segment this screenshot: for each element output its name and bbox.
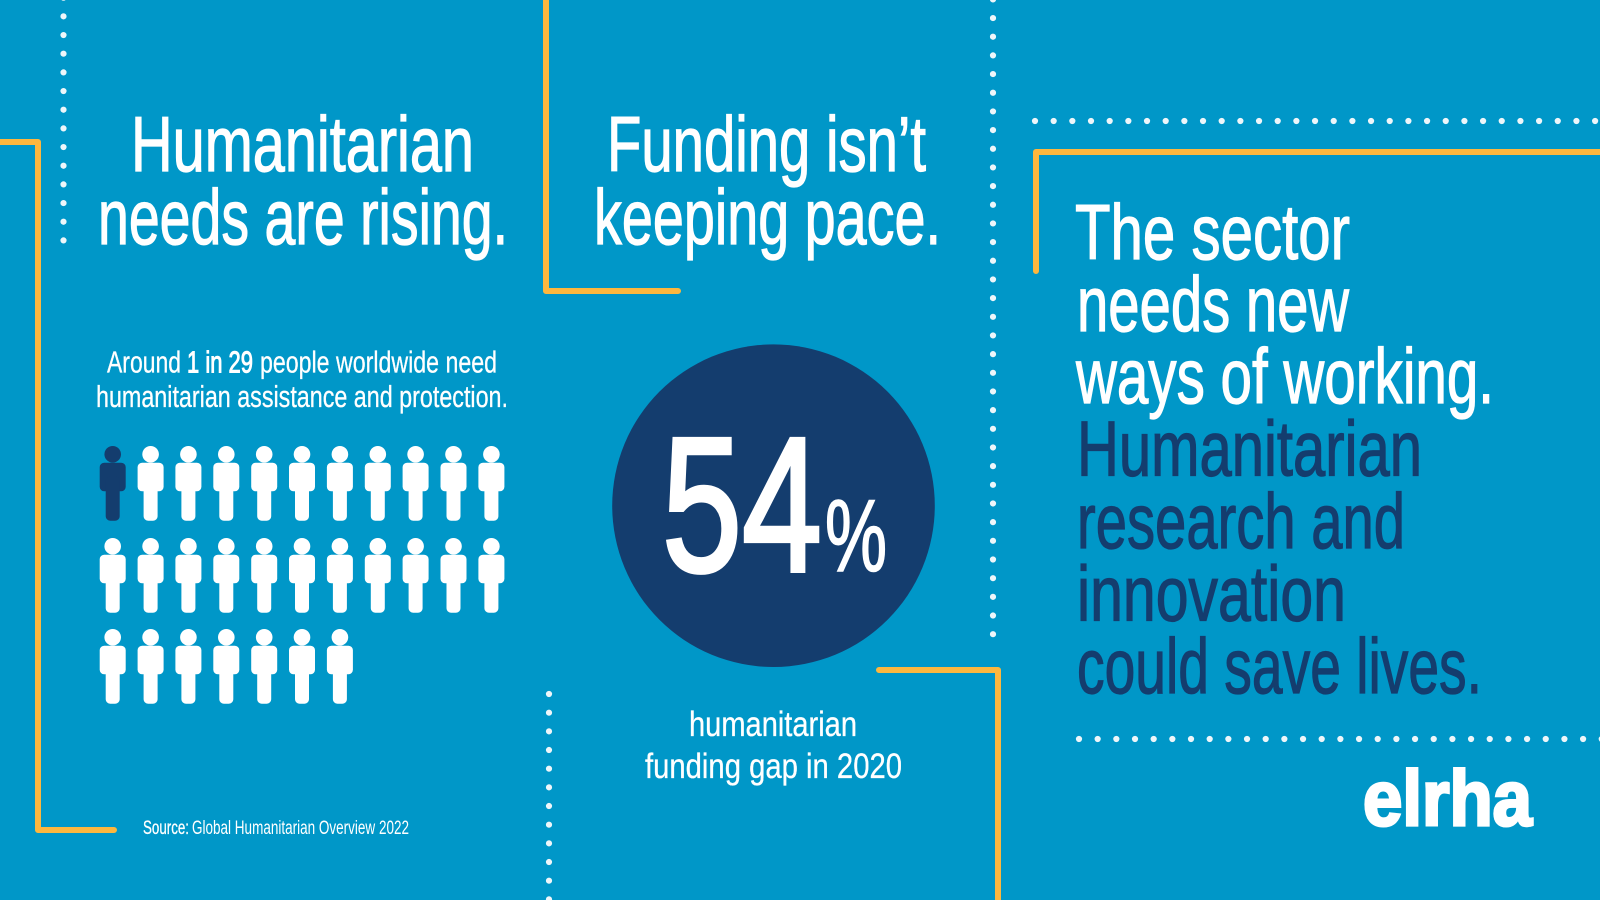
statement: research and innovation: research and [1077,477,1405,565]
text block: 1 in 29 people: humanitarian assistance and protection. [96,379,508,414]
statement: research and innovation: Humanitarian [1077,404,1422,492]
panel: new ways of working [1075,188,1533,842]
statement: research and innovation [1077,404,1482,710]
stat circle: 54% [612,344,935,667]
caption: funding gap: humanitarian [689,705,857,744]
caption: funding gap: funding gap in 2020 [645,747,902,786]
yellow bracket: middle panel bottom [879,670,998,900]
stat circle: 54%: 54 [662,397,822,612]
heading: needs are rising [98,100,508,261]
panel: humanitarian needs [96,100,508,839]
text block: 1 in 29 people: Around [107,344,181,380]
pictogram: 29 people, 1 highlighted [100,446,504,704]
heading: the sector needs new ways of working: needs new [1077,260,1349,348]
yellow bracket: left panel [0,142,114,830]
heading: funding isn't keeping pace: keeping pace. [594,173,941,261]
source note: Source: [143,818,189,839]
heading: the sector needs new ways of working [1075,188,1494,420]
text block: 1 in 29 people: 1 in 29 [187,344,253,380]
source note [143,818,409,839]
stat circle: 54%: % [825,479,887,593]
statement: research and innovation: innovation [1077,550,1346,638]
source note: Global Humanitarian Overview 2022 [192,818,409,839]
yellow bracket: middle panel top [546,0,678,291]
heading: funding isn't keeping pace [594,100,941,261]
panel: funding gap [594,100,941,786]
logo: elrha: elrha [1363,754,1533,842]
yellow bracket: right panel [1036,152,1600,271]
heading: needs are rising: Humanitarian [131,100,474,188]
heading: funding isn't keeping pace: Funding isn’t [607,100,926,188]
heading: needs are rising: needs are rising. [98,173,508,261]
text block: 1 in 29 people: people worldwide need [260,344,497,380]
text block: 1 in 29 people [96,344,508,414]
heading: the sector needs new ways of working: The sector [1075,188,1350,276]
caption: funding gap [645,705,902,786]
